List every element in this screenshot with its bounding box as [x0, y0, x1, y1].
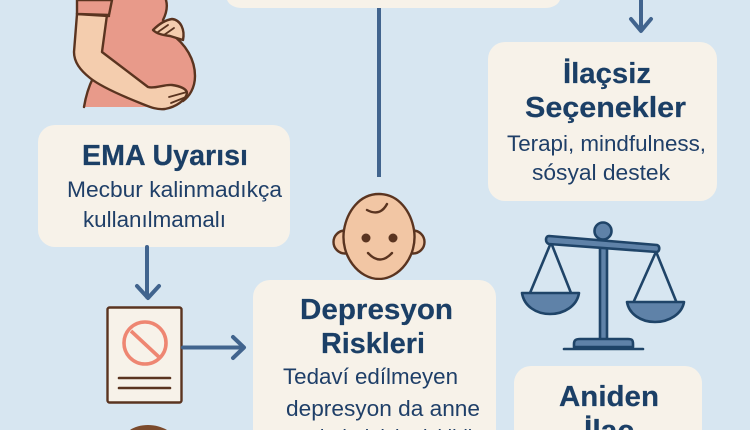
- icon: head cropped at bottom: [130, 425, 167, 430]
- icon: pregnant woman: [74, 0, 195, 109]
- icon: prohibition document: [108, 308, 182, 402]
- heading: non-drug line 2: Seçenekler: [525, 92, 686, 124]
- body text: options line 2: sósyal destek: [532, 160, 671, 185]
- panel: depression risks: [253, 280, 496, 430]
- heading: depression risks line 2: Riskleri: [321, 328, 425, 360]
- icon: balance scale: [522, 222, 684, 349]
- heading: depression risks line 1: Depresyon: [300, 294, 453, 326]
- arrow: down to non-drug options: [631, 0, 651, 31]
- icon: baby face: [334, 194, 424, 279]
- panel: non-drug options: [488, 42, 717, 201]
- body text: EMA warning line 1: Mecbur kalinmadıkça: [67, 177, 282, 202]
- heading: EMA warning: EMA Uyarısı: [82, 140, 248, 172]
- body text: options line 1: Terapi, mindfulness,: [507, 131, 706, 156]
- body text: EMA warning line 2: kullanılmamalı: [83, 207, 226, 232]
- panel: EMA warning: [38, 125, 290, 247]
- arrow: EMA to document: [137, 247, 159, 298]
- heading: sudden line 1: Aniden: [559, 381, 659, 413]
- arrow: document to depression risks: [183, 337, 244, 358]
- heading: non-drug line 1: İlaçsiz: [563, 58, 651, 90]
- panel: sudden discontinuation: [514, 366, 702, 430]
- body text line 1: Tedaví edílmeyen: [283, 364, 458, 389]
- connector line from top box to baby: [377, 8, 381, 177]
- body text line 2: depresyon da anne: [286, 396, 480, 421]
- panel: top box cropped: [227, 0, 560, 8]
